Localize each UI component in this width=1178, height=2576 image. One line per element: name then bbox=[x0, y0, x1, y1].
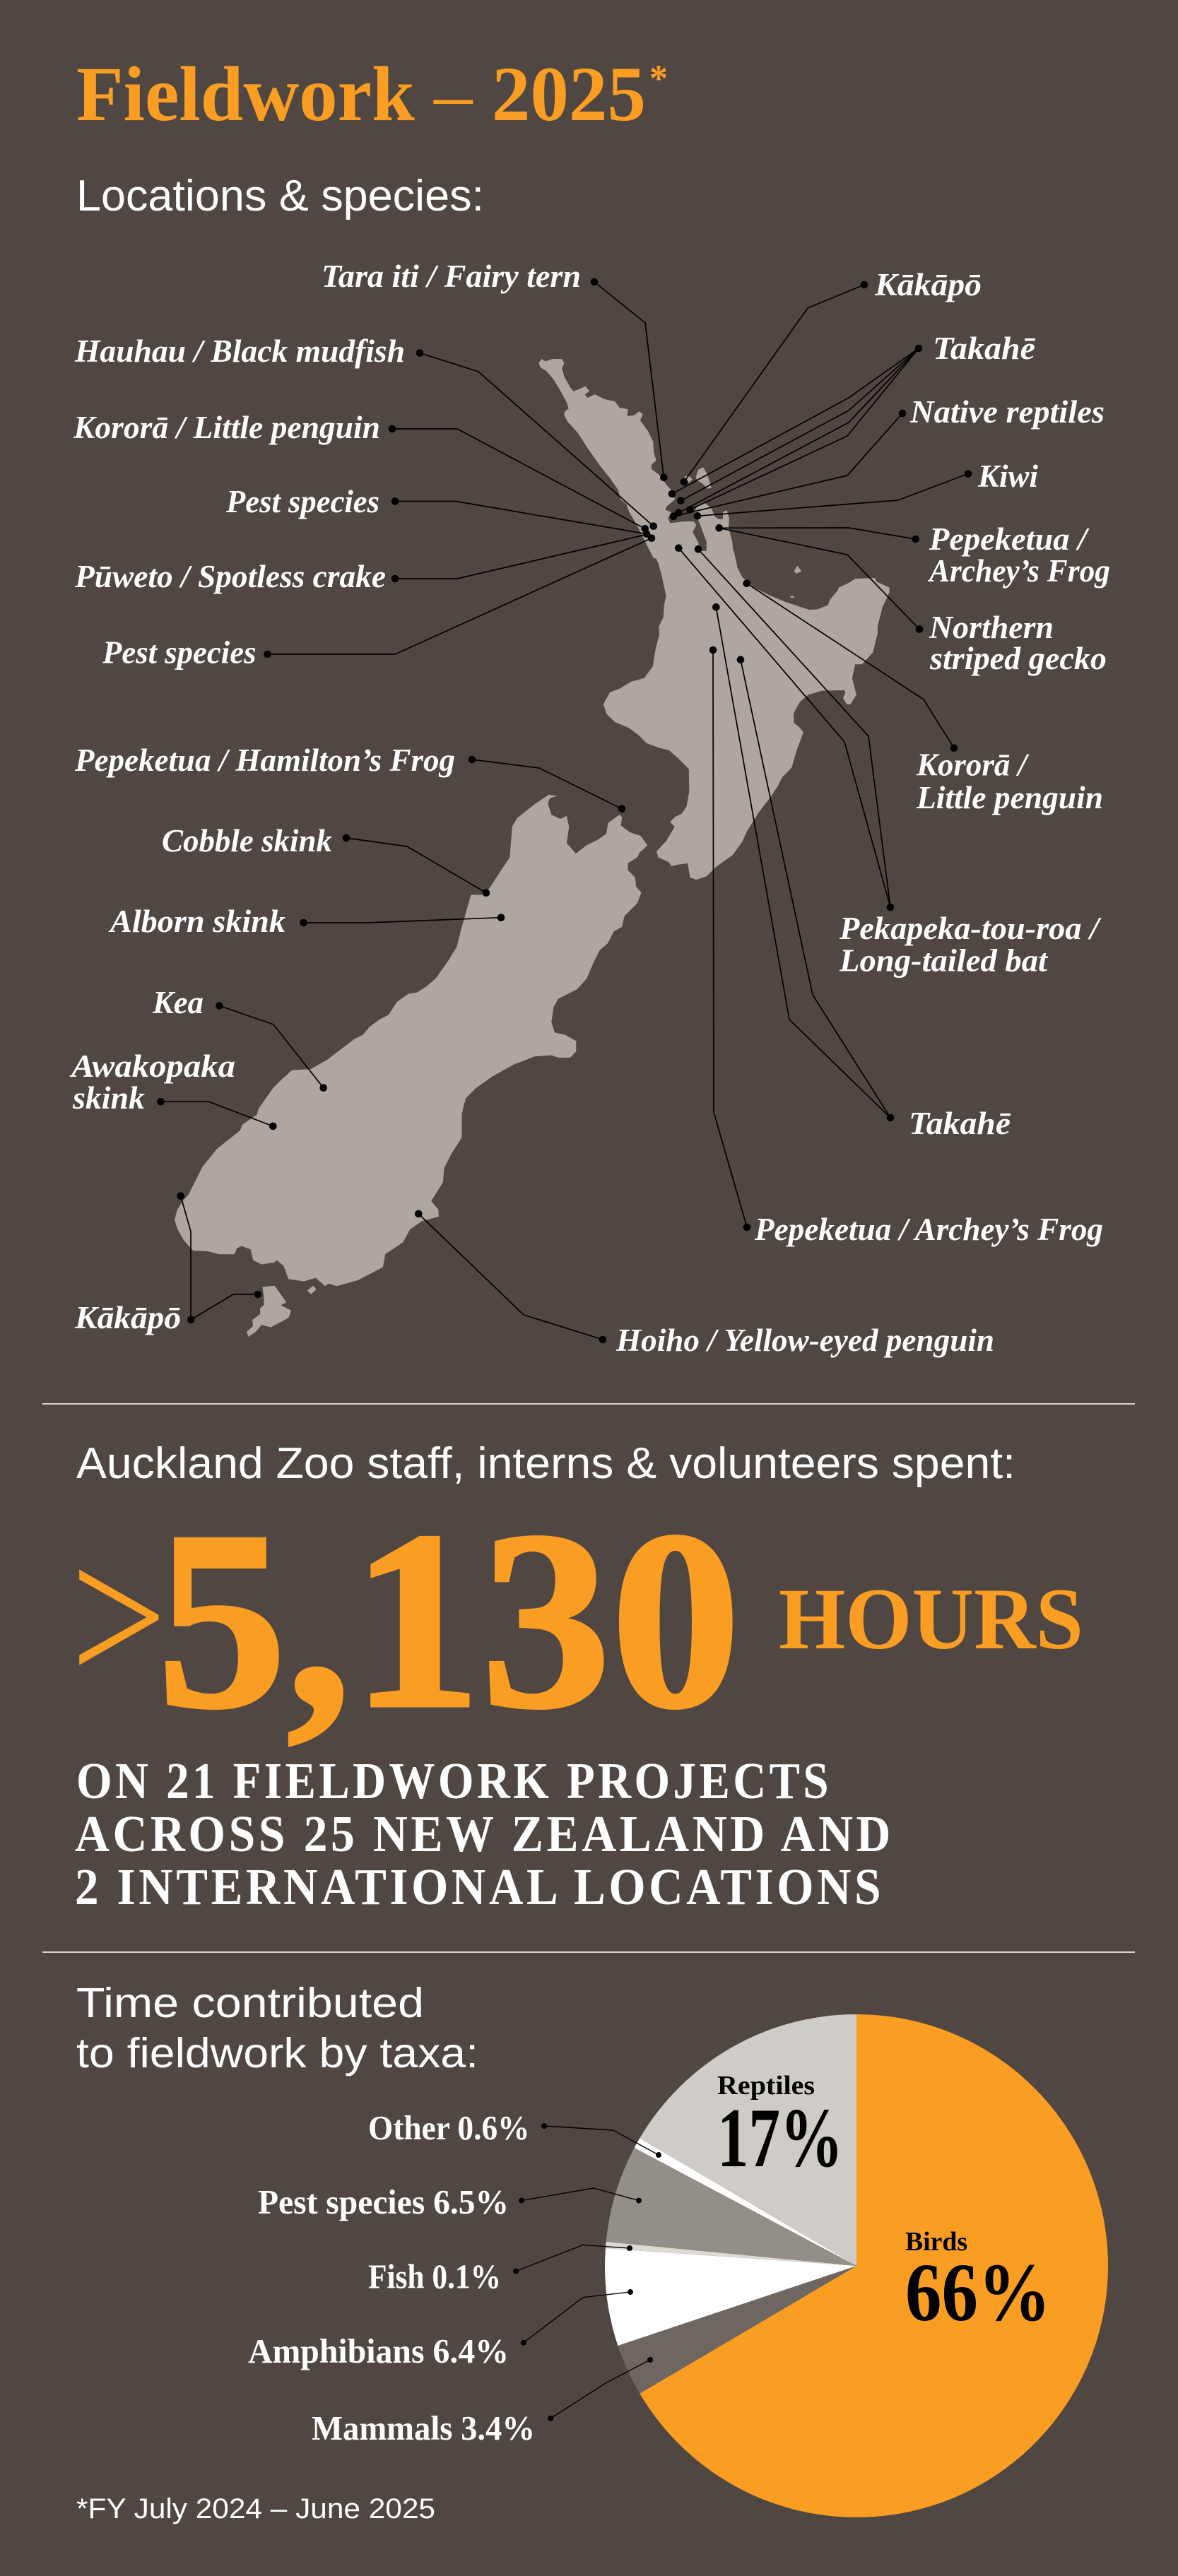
heading: time by taxa: Time contributed bbox=[76, 1980, 424, 2026]
callout: mammals 3.4% bbox=[312, 2357, 653, 2447]
callout: Kea: Kea bbox=[152, 985, 204, 1020]
callout: Kiwi: Kiwi bbox=[977, 459, 1038, 494]
callout: amphibians 6.4% bbox=[248, 2289, 633, 2370]
callout: amphibians 6.4%: Amphibians 6.4% bbox=[248, 2332, 509, 2370]
label: reptiles 17%: Reptiles bbox=[717, 2071, 815, 2101]
callout: Northern striped gecko: striped gecko bbox=[929, 641, 1107, 676]
big number: more than 5,130 hours: HOURS bbox=[779, 1571, 1083, 1667]
callout: Takahē central bbox=[712, 603, 1011, 1141]
callout: Pepeketua / Hamilton's Frog: Pepeketua / Hamilton’s Frog bbox=[74, 743, 455, 778]
slice: amphibians bbox=[605, 2248, 856, 2346]
callout: Kiwi bbox=[694, 459, 1038, 520]
title: Fieldwork – 2025 bbox=[76, 51, 646, 137]
pie chart: taxa bbox=[605, 2014, 1108, 2517]
callout: Native reptiles bbox=[670, 394, 1105, 520]
callout: Alborn skink bbox=[108, 904, 505, 939]
callout: Tara iti / Fairy tern: Tara iti / Fairy tern bbox=[322, 259, 581, 294]
callout: Kea bbox=[152, 985, 327, 1092]
slice: other bbox=[635, 2138, 856, 2266]
heading: staff time: Auckland Zoo staff, interns & volunteers spent: bbox=[76, 1439, 1015, 1488]
Stewart Island bbox=[247, 1286, 316, 1337]
callout: Hoiho / Yellow-eyed penguin: Hoiho / Yellow-eyed penguin bbox=[615, 1323, 994, 1358]
label: birds 66%: 66% bbox=[905, 2246, 1051, 2339]
heading: time by taxa bbox=[76, 1980, 478, 2076]
callout: Pūweto / Spotless crake: Pūweto / Spotless crake bbox=[74, 559, 386, 594]
callout: Cobble skink bbox=[162, 823, 490, 897]
callout: Takahē central: Takahē bbox=[909, 1106, 1011, 1141]
heading: locations and species: Locations & species: bbox=[76, 172, 484, 220]
title: * bbox=[649, 57, 668, 100]
callout: pest species 6.5% bbox=[258, 2182, 642, 2221]
statement: projects and locations: ACROSS 25 NEW ZEALAND AND bbox=[75, 1805, 894, 1862]
callout: Awakopaka skink bbox=[69, 1048, 277, 1130]
South Island bbox=[175, 795, 647, 1286]
big number: more than 5,130 hours: 5,130 bbox=[157, 1479, 741, 1761]
label: birds 66%: Birds bbox=[905, 2227, 967, 2257]
callout: Pekapeka-tou-roa / Long-tailed bat: Pekapeka-tou-roa / bbox=[839, 911, 1102, 946]
callout: Kākāpō north: Kākāpō bbox=[874, 267, 982, 302]
slice: mammals bbox=[618, 2266, 856, 2394]
callout: Awakopaka skink: Awakopaka bbox=[69, 1048, 235, 1084]
statement: projects and locations bbox=[75, 1752, 894, 1915]
callout: Pekapeka-tou-roa / Long-tailed bat bbox=[675, 544, 1102, 978]
slice: pest species bbox=[606, 2148, 856, 2266]
statement: projects and locations: 2 INTERNATIONAL LOCATIONS bbox=[75, 1858, 884, 1915]
callout: Hoiho / Yellow-eyed penguin bbox=[415, 1210, 994, 1358]
callout: pest species 6.5%: Pest species 6.5% bbox=[258, 2182, 509, 2221]
callout: Hauhau / Black mudfish: Hauhau / Black mudfish bbox=[74, 333, 405, 369]
callout: other 0.6% bbox=[368, 2108, 661, 2158]
footnote: *FY July 2024 – June 2025 bbox=[76, 2493, 435, 2524]
map of New Zealand with callouts bbox=[69, 259, 1110, 1358]
callout: Kororā / Little penguin east: Little penguin bbox=[916, 780, 1103, 815]
callout: Kākāpō south: Kākāpō bbox=[74, 1300, 181, 1335]
big number: more than 5,130 hours: > bbox=[71, 1506, 167, 1726]
callout: Kororā / Little penguin west bbox=[73, 410, 649, 533]
callout: Northern striped gecko bbox=[719, 528, 1107, 676]
callout: fish 0.1%: Fish 0.1% bbox=[368, 2257, 501, 2296]
callout: Pūweto / Spotless crake bbox=[74, 534, 647, 594]
callout: Takahē north bbox=[668, 331, 1036, 516]
callout: Pepeketua / Archey's Frog central: Pepeketua / Archey’s Frog bbox=[754, 1212, 1103, 1247]
callout: Pepeketua / Archey's Frog north: Archey’s Frog bbox=[927, 553, 1110, 589]
slice: reptiles bbox=[640, 2014, 856, 2266]
slice: birds bbox=[640, 2014, 1108, 2517]
callout: Cobble skink: Cobble skink bbox=[162, 823, 332, 858]
callout: Kororā / Little penguin west: Kororā / Little penguin bbox=[73, 410, 380, 445]
callout: fish 0.1% bbox=[368, 2245, 632, 2296]
callout: Kākāpō north bbox=[681, 267, 982, 485]
callout: Kororā / Little penguin east bbox=[743, 579, 1103, 815]
callout: Pepeketua / Archey's Frog north: Pepeketua / bbox=[929, 521, 1090, 557]
North Island bbox=[539, 359, 889, 880]
callout: Tara iti / Fairy tern bbox=[322, 259, 668, 481]
callout: Awakopaka skink: skink bbox=[72, 1080, 146, 1116]
callout: Pest species lower bbox=[102, 534, 655, 670]
label: reptiles 17% bbox=[717, 2071, 843, 2185]
callout: other 0.6%: Other 0.6% bbox=[368, 2108, 530, 2147]
callout: Northern striped gecko: Northern bbox=[929, 610, 1054, 645]
slice: fish bbox=[606, 2242, 856, 2266]
callout: Pepeketua / Archey's Frog north bbox=[715, 521, 1110, 589]
label: reptiles 17%: 17% bbox=[717, 2091, 843, 2185]
statement: projects and locations: ON 21 FIELDWORK PROJECTS bbox=[76, 1752, 832, 1809]
callout: Native reptiles: Native reptiles bbox=[909, 394, 1105, 430]
callout: Takahē north: Takahē bbox=[933, 331, 1036, 366]
callout: Hauhau / Black mudfish bbox=[74, 333, 657, 530]
big number: more than 5,130 hours bbox=[71, 1479, 1083, 1761]
heading: time by taxa: to fieldwork by taxa: bbox=[76, 2030, 478, 2076]
callout: Pest species upper bbox=[225, 484, 650, 538]
callout: Pest species upper: Pest species bbox=[225, 484, 379, 519]
callout: Pepeketua / Archey's Frog central bbox=[709, 646, 1103, 1247]
callout: mammals 3.4%: Mammals 3.4% bbox=[312, 2409, 535, 2447]
callout: Kākāpō south bbox=[74, 1192, 261, 1335]
callout: Pepeketua / Hamilton's Frog bbox=[74, 743, 625, 813]
callout: Pest species lower: Pest species bbox=[102, 634, 256, 670]
callout: Kororā / Little penguin east: Kororā / bbox=[916, 748, 1029, 783]
callout: Alborn skink: Alborn skink bbox=[108, 904, 286, 939]
callout: Pekapeka-tou-roa / Long-tailed bat: Long-tailed bat bbox=[839, 943, 1049, 978]
